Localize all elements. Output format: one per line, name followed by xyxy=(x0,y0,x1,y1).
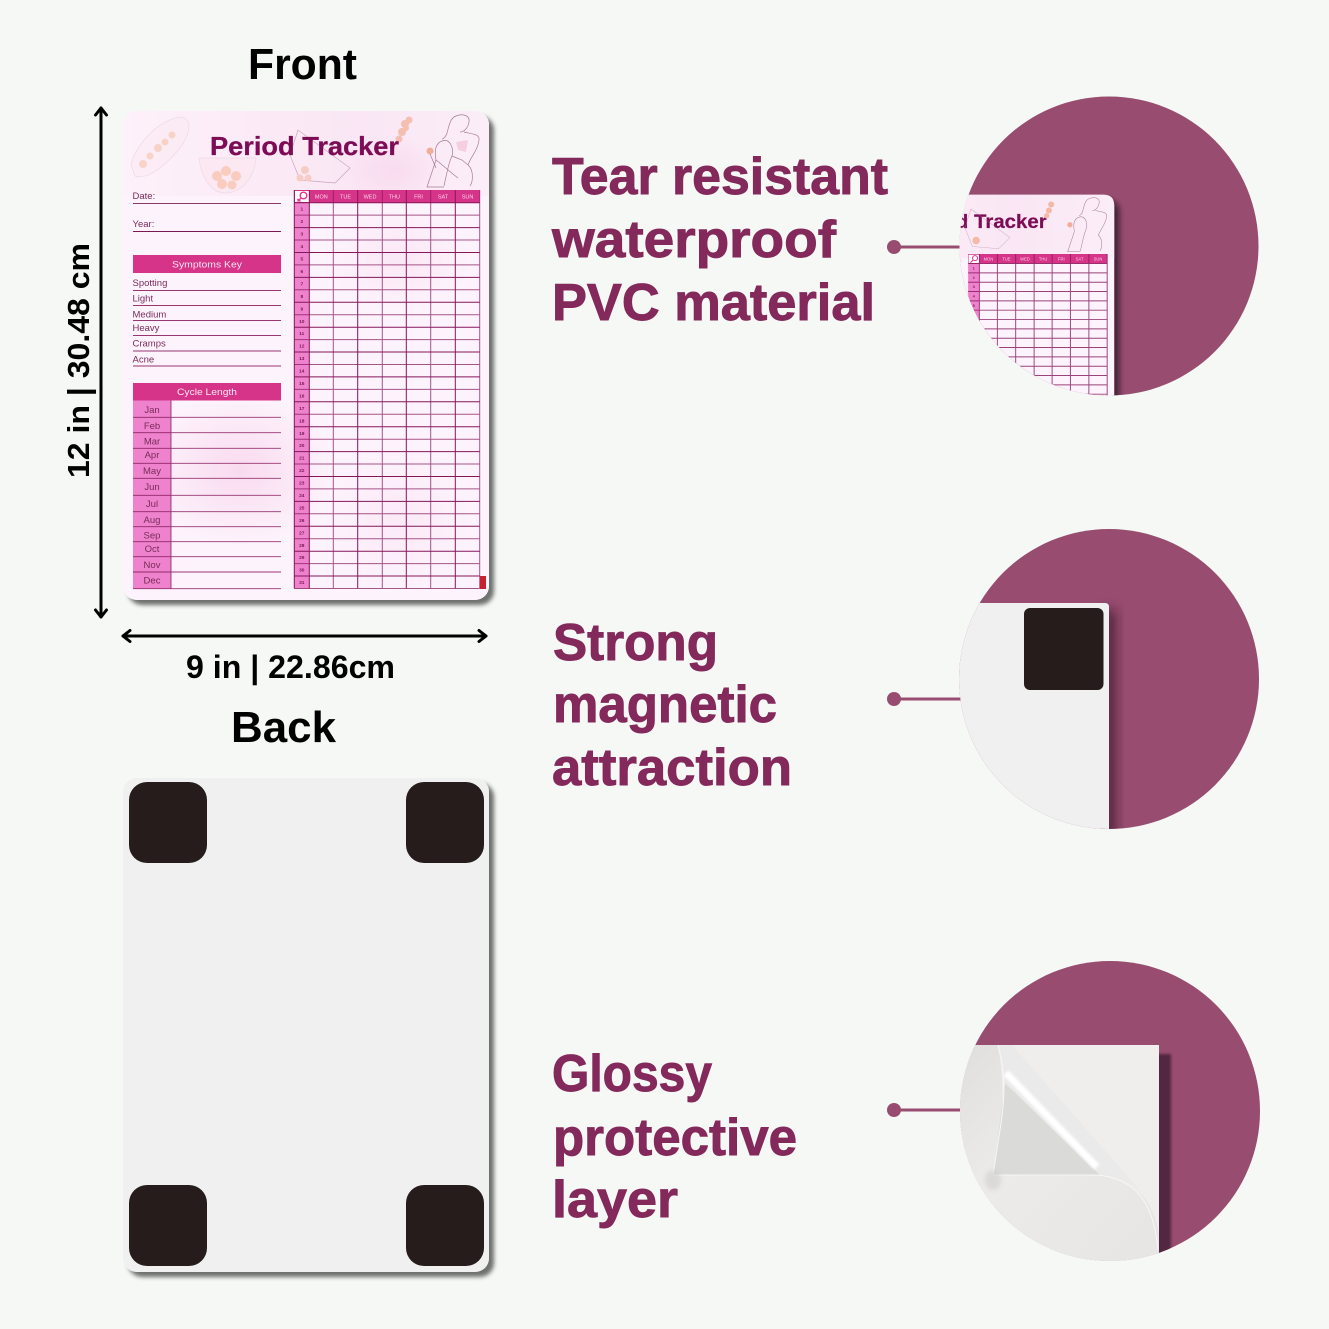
heading: Back: Back xyxy=(231,703,337,752)
magnet: top right xyxy=(406,782,484,863)
day numbers: 9 xyxy=(300,306,303,312)
day numbers: 8 xyxy=(300,294,303,300)
red tag xyxy=(480,576,486,589)
panel: cycle length: Nov xyxy=(144,560,161,571)
day numbers: 14 xyxy=(299,368,305,374)
weekday labels: THU xyxy=(389,194,400,200)
day numbers: 21 xyxy=(299,456,305,462)
day numbers: 29 xyxy=(299,555,305,561)
day numbers: 16 xyxy=(299,393,305,399)
close-up: magnet xyxy=(1024,608,1104,690)
panel: symptoms key: Heavy xyxy=(132,323,160,334)
panel: cycle length: Mar xyxy=(144,436,160,448)
close-up: calendar grid: FRI xyxy=(1058,256,1065,261)
close-up: illustration xyxy=(965,198,1107,252)
panel: cycle length: Oct xyxy=(145,544,160,555)
day numbers: 1 xyxy=(300,207,303,213)
connector: tear resistant xyxy=(887,240,962,254)
day numbers: 18 xyxy=(299,418,305,424)
panel: cycle length: Jun xyxy=(144,482,160,493)
panel: symptoms key: Symptoms Key xyxy=(172,260,242,270)
panel: cycle length: Cycle Length xyxy=(177,387,237,398)
close-up: peeled corner xyxy=(950,1045,1159,1270)
panel: cycle length: May xyxy=(143,466,161,477)
illustration: menstrual cup xyxy=(199,158,256,193)
circle: magnet close-up xyxy=(959,529,1259,829)
panel: symptoms key: Spotting xyxy=(132,278,167,289)
arrow: width dimension xyxy=(123,630,486,642)
magnet: bottom left xyxy=(129,1185,207,1266)
weekday labels: WED xyxy=(364,194,376,200)
arrow: height dimension xyxy=(96,108,106,617)
heading: Front: Front xyxy=(248,40,357,89)
close-up: calendar grid: 5 xyxy=(973,304,975,308)
day numbers: 20 xyxy=(299,443,305,449)
weekday labels: FRI xyxy=(414,194,423,200)
close-up: title: Period Tracker xyxy=(905,211,1047,233)
close-up: calendar grid: WED xyxy=(1020,256,1030,261)
panel: symptoms key xyxy=(132,255,281,366)
feature text: glossy: layer xyxy=(552,1171,678,1229)
weekday labels: TUE xyxy=(340,194,351,200)
panel: cycle length: Feb xyxy=(144,421,160,432)
day numbers: 26 xyxy=(299,518,305,524)
day numbers: 25 xyxy=(299,505,305,511)
panel: cycle length: Jul xyxy=(146,499,158,510)
day numbers: 19 xyxy=(299,431,305,437)
close-up: calendar grid: 3 xyxy=(973,285,975,289)
close-up: calendar grid: SAT xyxy=(1076,256,1084,261)
weekday labels xyxy=(315,194,473,200)
feature text: tear resistant xyxy=(551,148,888,332)
feature text: magnetic: attraction xyxy=(552,739,792,797)
day numbers: 7 xyxy=(300,281,303,287)
panel: front of tracker xyxy=(123,111,489,600)
day numbers: 15 xyxy=(299,381,305,387)
close-up: calendar grid: SUN xyxy=(1094,256,1102,261)
panel: symptoms key: Cramps xyxy=(132,338,166,350)
day numbers: 12 xyxy=(299,344,305,350)
panel: cycle length: Apr xyxy=(145,450,159,461)
illustration: flowers xyxy=(396,116,412,142)
feature text: glossy xyxy=(552,1045,797,1229)
circle: tracker close-up xyxy=(960,96,1258,396)
feature text: tear resistant: PVC material xyxy=(552,274,875,332)
day numbers: 27 xyxy=(299,530,305,536)
feature text: magnetic: Strong xyxy=(553,614,718,672)
feature text: tear resistant: waterproof xyxy=(551,211,837,269)
close-up: calendar grid: 1 xyxy=(973,267,975,271)
close-up: shadow xyxy=(1100,610,1116,840)
illustration: pad xyxy=(131,117,189,177)
feature text: tear resistant: Tear resistant xyxy=(552,148,888,206)
feature text: glossy: protective xyxy=(553,1109,797,1167)
connector: magnetic xyxy=(887,692,962,706)
calendar grid xyxy=(294,190,480,588)
field: date: Date: xyxy=(132,191,155,202)
connector: glossy xyxy=(887,1103,962,1117)
day numbers xyxy=(299,207,305,586)
panel: cycle length: Aug xyxy=(144,515,160,526)
close-up: back of sheet xyxy=(959,603,1109,829)
panel: cycle length: Jan xyxy=(144,405,160,416)
panel: cycle length: Dec xyxy=(144,576,161,586)
day numbers: 23 xyxy=(299,480,305,486)
circle: protective layer close-up xyxy=(960,961,1260,1261)
day numbers: 17 xyxy=(299,406,305,412)
day numbers: 3 xyxy=(300,232,303,238)
icon: female symbol xyxy=(298,192,307,202)
illustration: seated woman xyxy=(426,115,479,187)
day numbers: 30 xyxy=(299,568,305,574)
magnet: top left xyxy=(129,782,207,863)
close-up: shadow xyxy=(1155,1054,1171,1266)
panel: symptoms key: Acne xyxy=(132,354,154,366)
day numbers: 28 xyxy=(299,543,305,549)
feature text: magnetic xyxy=(552,614,792,797)
field: year: Year: xyxy=(132,219,154,230)
day numbers: 11 xyxy=(299,331,305,337)
panel: symptoms key: Medium xyxy=(132,310,166,320)
close-up: calendar grid: MON xyxy=(984,256,993,261)
day numbers: 10 xyxy=(299,319,305,325)
weekday labels: SAT xyxy=(438,194,449,200)
panel: symptoms key: Light xyxy=(132,294,153,304)
day numbers: 31 xyxy=(299,580,305,586)
day numbers: 13 xyxy=(299,356,305,362)
panel: back of tracker xyxy=(123,778,489,1272)
feature text: glossy: Glossy xyxy=(552,1045,712,1103)
close-up: calendar grid: 2 xyxy=(973,276,975,280)
close-up: calendar grid: 4 xyxy=(973,295,975,299)
panel: cycle length: Sep xyxy=(144,530,160,542)
day numbers: 4 xyxy=(300,244,303,250)
close-up: sheet xyxy=(950,1045,1159,1270)
panel: cycle length xyxy=(133,383,281,589)
day numbers: 5 xyxy=(300,256,303,262)
day numbers: 2 xyxy=(300,219,303,225)
day numbers: 24 xyxy=(299,493,305,499)
label: width dimension: 9 in | 22.86cm xyxy=(186,649,395,685)
title: Period Tracker xyxy=(210,131,399,161)
weekday labels: MON xyxy=(315,194,328,200)
feature text: magnetic: magnetic xyxy=(553,676,777,734)
day numbers: 22 xyxy=(299,468,305,474)
day numbers: 6 xyxy=(300,269,303,275)
illustration: underwear xyxy=(290,130,350,183)
close-up: calendar grid xyxy=(968,254,1108,396)
magnet: bottom right xyxy=(406,1185,484,1266)
label: height dimension: 12 in | 30.48 cm xyxy=(61,243,96,478)
weekday labels: SUN xyxy=(462,194,473,200)
close-up: calendar grid: THU xyxy=(1039,256,1047,261)
close-up: calendar grid: TUE xyxy=(1002,256,1011,261)
